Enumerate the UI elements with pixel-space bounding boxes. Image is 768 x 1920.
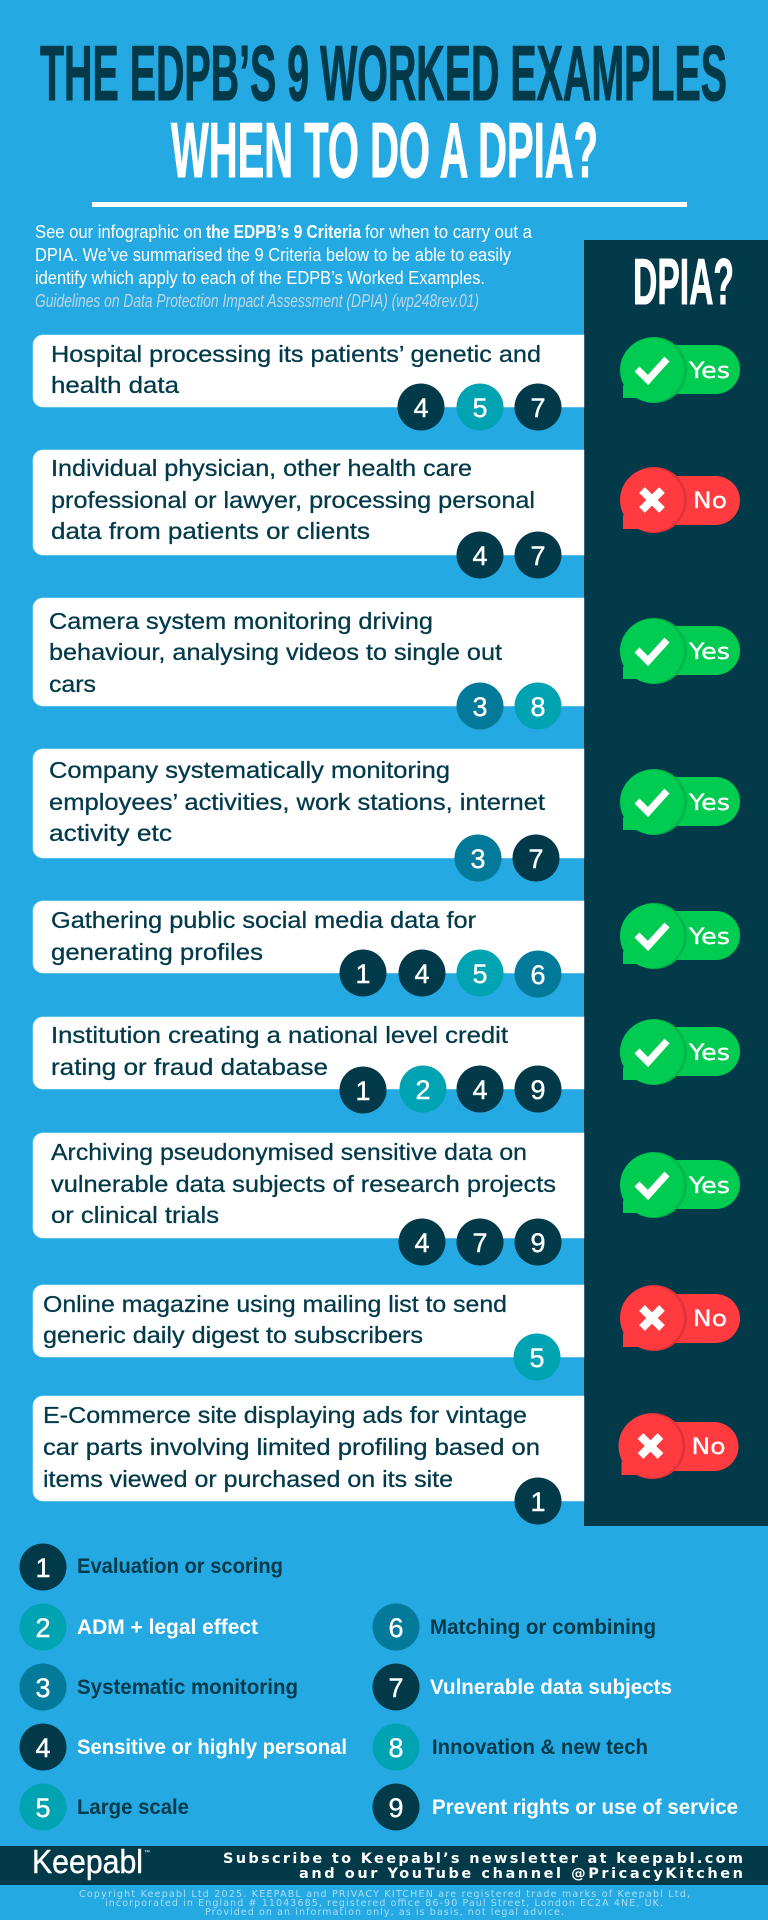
badge 8: 8 <box>530 692 546 722</box>
badge 5: 5 <box>472 959 488 989</box>
panel: row 4 employees <box>33 749 584 882</box>
badge 1 <box>340 1066 386 1114</box>
panel: row 3 camera: Camera system monitoring driving <box>49 608 433 634</box>
panel: row 5 social media: Gathering public social media data for <box>51 907 476 933</box>
newsletter call to action <box>223 1851 743 1882</box>
legend item 6: 6 <box>388 1613 404 1643</box>
legend item 7: 7 <box>388 1673 404 1703</box>
verdict: row 4 yes: Yes <box>688 791 730 816</box>
badge 4 <box>456 532 504 578</box>
legend item 6: Matching or combining <box>430 1616 656 1639</box>
badge 5 <box>456 950 504 996</box>
legend item 5 <box>20 1784 189 1830</box>
panel: row 1 hospital: health data <box>51 372 180 398</box>
intro text block: See our infographic on <box>35 222 202 242</box>
legend item 3: 3 <box>35 1673 51 1703</box>
panel: row 2 physician: Individual physician, other health care <box>51 455 472 481</box>
newsletter call to action: Subscribe to Keepabl’s newsletter at keepabl.com <box>223 1851 743 1867</box>
panel: row 1 hospital <box>33 335 584 430</box>
badge 5: 5 <box>529 1343 545 1373</box>
legend item 6 <box>372 1604 656 1650</box>
badge 3: 3 <box>472 692 488 722</box>
panel: row 8 online magazine <box>33 1285 584 1380</box>
panel: row 5 social media <box>33 901 584 998</box>
badge 4: 4 <box>414 1228 430 1258</box>
panel: row 5 social media: generating profiles <box>51 939 263 965</box>
badge 4: 4 <box>472 1075 488 1105</box>
legend: 9 criteria <box>20 1544 738 1830</box>
legend item 8: 8 <box>388 1733 404 1763</box>
badge 7 <box>514 384 562 430</box>
footer bar <box>0 1843 768 1885</box>
panel: row 9 e-commerce: E-Commerce site displaying ads for vintage <box>43 1402 527 1428</box>
panel: row 9 e-commerce: car parts involving limited profiling based on <box>43 1434 540 1460</box>
badge 4: 4 <box>472 541 488 571</box>
verdict: row 4 yes <box>620 769 740 835</box>
badge 9: 9 <box>530 1075 546 1105</box>
badge 1 <box>340 950 386 996</box>
intro text block <box>35 222 533 311</box>
verdict: row 2 no: No <box>693 489 727 514</box>
legend item 4: Sensitive or highly personal <box>77 1736 347 1759</box>
panel: row 3 camera: behaviour, analysing videos to single out <box>49 639 502 665</box>
panel: row 7 archiving <box>33 1133 584 1266</box>
intro text block: the EDPB’s 9 Criteria <box>206 222 362 242</box>
legend item 2: 2 <box>35 1613 51 1643</box>
badge 5 <box>514 1334 560 1380</box>
verdict: row 5 yes <box>620 903 740 969</box>
verdict: row 6 yes <box>620 1019 740 1085</box>
copyright text <box>79 1889 690 1918</box>
panel: row 8 online magazine: generic daily digest to subscribers <box>43 1322 423 1348</box>
legend item 8 <box>372 1724 648 1770</box>
legend item 7 <box>372 1664 672 1710</box>
verdict: row 9 no <box>618 1413 738 1479</box>
badge 2 <box>400 1066 446 1112</box>
legend item 1: 1 <box>35 1553 51 1583</box>
legend item 8: Innovation & new tech <box>432 1736 648 1759</box>
intro text block: for when to carry out a <box>365 222 533 242</box>
panel: row 3 camera: cars <box>49 671 96 697</box>
verdict: row 8 no: No <box>693 1307 727 1332</box>
panel: row 9 e-commerce: items viewed or purchased on its site <box>43 1466 453 1492</box>
badge 7: 7 <box>528 844 544 874</box>
verdict: row 3 yes: Yes <box>688 640 730 665</box>
panel: row 4 employees: employees’ activities, work stations, internet <box>49 789 546 815</box>
verdict: row 6 yes: Yes <box>688 1041 730 1066</box>
panel: row 7 archiving: vulnerable data subjects of research projects <box>51 1171 556 1197</box>
panel: row 6 credit rating <box>33 1017 584 1114</box>
legend item 3: Systematic monitoring <box>77 1676 298 1699</box>
badge 7 <box>456 1218 504 1266</box>
badge 1: 1 <box>530 1487 546 1517</box>
copyright text: Provided on an information only, as is basis, not legal advice. <box>205 1907 564 1918</box>
legend item 1 <box>20 1544 283 1590</box>
panel: row 3 camera <box>33 598 584 730</box>
badge 4 <box>398 950 446 996</box>
verdict: row 9 no: No <box>692 1435 726 1460</box>
legend item 2: ADM + legal effect <box>77 1616 258 1639</box>
badge 6: 6 <box>530 960 546 990</box>
verdict: row 1 yes <box>620 337 740 403</box>
badge 4 <box>456 1066 504 1112</box>
legend item 4: 4 <box>35 1733 51 1763</box>
badge 3 <box>456 682 504 730</box>
badge 9 <box>514 1066 562 1112</box>
panel: row 7 archiving: Archiving pseudonymised sensitive data on <box>51 1139 527 1165</box>
logo: Keepabl: ™ <box>144 1849 150 1856</box>
legend item 4 <box>20 1724 347 1770</box>
badge 4: 4 <box>414 959 430 989</box>
legend item 3 <box>20 1664 298 1710</box>
legend item 5: 5 <box>35 1793 51 1823</box>
badge 1: 1 <box>355 1076 371 1106</box>
verdict: row 5 yes: Yes <box>688 925 730 950</box>
intro text block: identify which apply to each of the EDPB’s Worked Examples. <box>35 268 485 288</box>
verdict: row 7 yes: Yes <box>688 1174 730 1199</box>
badge 7: 7 <box>472 1228 488 1258</box>
badge 8 <box>514 682 562 730</box>
badge 3 <box>454 834 502 882</box>
badge 9: 9 <box>530 1228 546 1258</box>
badge 1 <box>514 1478 562 1524</box>
legend item 7: Vulnerable data subjects <box>430 1676 672 1699</box>
panel: row 6 credit rating: Institution creating a national level credit <box>51 1022 509 1048</box>
badge 4: 4 <box>413 393 429 423</box>
intro text block: DPIA. We’ve summarised the 9 Criteria below to be able to easily <box>35 245 511 265</box>
legend item 9: Prevent rights or use of service <box>432 1796 738 1819</box>
badge 1: 1 <box>355 959 371 989</box>
panel: row 6 credit rating: rating or fraud database <box>51 1054 328 1080</box>
badge 3: 3 <box>470 844 486 874</box>
panel: row 2 physician: data from patients or clients <box>51 518 370 544</box>
panel: row 1 hospital: Hospital processing its patients’ genetic and <box>51 341 541 367</box>
verdict: row 2 no <box>620 467 740 533</box>
legend item 2 <box>20 1604 258 1650</box>
panel: row 4 employees: Company systematically monitoring <box>49 757 450 783</box>
badge 4 <box>398 384 444 430</box>
badge 4 <box>398 1218 446 1266</box>
badge 2: 2 <box>415 1075 431 1105</box>
newsletter call to action: and our YouTube channel @PricacyKitchen <box>299 1866 743 1882</box>
badge 7: 7 <box>530 393 546 423</box>
intro text block: Guidelines on Data Protection Impact Assessment (DPIA) (wp248rev.01) <box>35 291 479 311</box>
badge 5 <box>456 384 504 430</box>
legend item 9: 9 <box>388 1793 404 1823</box>
panel: row 9 e-commerce <box>33 1396 584 1524</box>
legend item 9 <box>372 1784 738 1830</box>
panel: row 8 online magazine: Online magazine using mailing list to send <box>43 1291 507 1317</box>
legend item 1: Evaluation or scoring <box>77 1555 283 1578</box>
title <box>40 29 727 194</box>
legend item 5: Large scale <box>77 1796 189 1819</box>
copyright text: Copyright Keepabl Ltd 2025. KEEPABL and PRIVACY KITCHEN are registered trade marks of Keepabl Ltd, <box>79 1889 690 1900</box>
logo: Keepabl: Keepabl <box>32 1843 143 1880</box>
panel: row 7 archiving: or clinical trials <box>51 1202 219 1228</box>
verdict: row 8 no <box>620 1285 740 1351</box>
verdict: row 7 yes <box>620 1152 740 1218</box>
panel: row 2 physician <box>33 450 584 578</box>
badge 7 <box>512 834 560 882</box>
badge 9 <box>514 1218 562 1266</box>
badge 5: 5 <box>472 393 488 423</box>
badge 6 <box>514 950 562 998</box>
verdict: row 3 yes <box>620 618 740 684</box>
verdict: row 1 yes: Yes <box>688 359 730 384</box>
badge 7: 7 <box>530 541 546 571</box>
copyright text: incorporated in England # 11043685, registered office 86-90 Paul Street, London EC2A 4NE, UK. <box>105 1898 663 1909</box>
panel: row 4 employees: activity etc <box>49 820 172 846</box>
panel: DPIA verdict column <box>584 240 768 1526</box>
panel: row 2 physician: professional or lawyer, processing personal <box>51 487 535 513</box>
badge 7 <box>514 532 562 578</box>
